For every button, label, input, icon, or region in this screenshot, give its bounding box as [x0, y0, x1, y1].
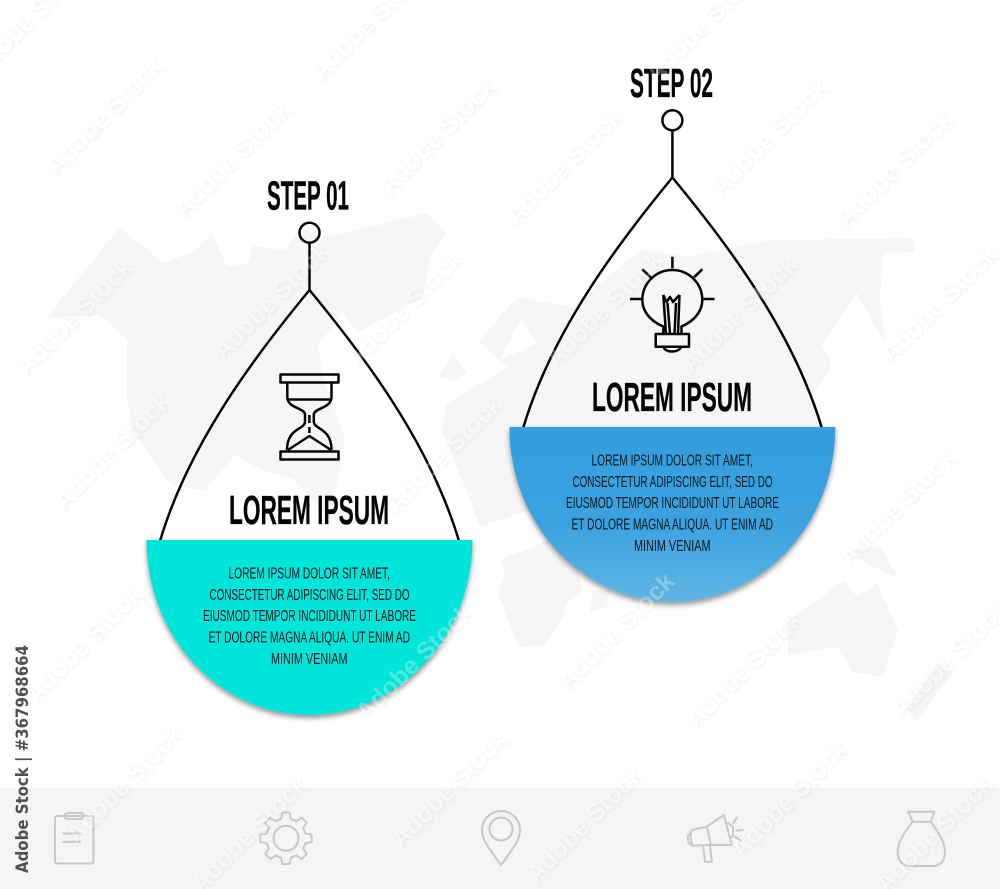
icon: megaphone [688, 815, 743, 862]
stock watermarks: Adobe Stock [373, 72, 501, 200]
stock watermarks: Adobe Stock [520, 760, 648, 888]
step 02 teardrop [509, 60, 835, 602]
stock watermarks: Adobe Stock [830, 105, 958, 233]
step 01 teal panel [146, 540, 472, 715]
step 02 label: STEP 02 [630, 60, 713, 106]
stock watermarks: Adobe Stock [168, 95, 296, 223]
stock watermarks: Adobe Stock [48, 387, 176, 515]
stock watermarks: Adobe Stock [380, 390, 508, 518]
step 01 drop outline [160, 290, 459, 541]
step 02 body text: LOREM IPSUM DOLOR SIT AMET, [592, 452, 753, 470]
step 02 body text: EIUSMOD TEMPOR INCIDIDUNT UT LABORE [566, 495, 779, 512]
stock watermarks: Adobe Stock [725, 735, 853, 863]
step 02 heading: LOREM IPSUM [592, 374, 752, 420]
stock watermarks: Adobe Stock [60, 720, 188, 848]
step 01 teardrop [146, 172, 472, 715]
step 01 heading: LOREM IPSUM [229, 487, 389, 533]
step 01 body text: ET DOLORE MAGNA ALIQUA. UT ENIM AD [208, 630, 410, 646]
step 01 label: STEP 01 [267, 172, 349, 218]
icon: map pin [482, 811, 520, 865]
stock watermarks: Adobe Stock [500, 102, 628, 230]
step 01 body text: EIUSMOD TEMPOR INCIDIDUNT UT LABORE [203, 608, 416, 625]
step 02 blue panel [509, 427, 835, 602]
icon: clipboard [55, 813, 94, 864]
stock watermarks: Adobe Stock [20, 580, 148, 708]
stock watermarks: Adobe Stock [10, 253, 138, 381]
step 02 body text: MINIM VENIAM [634, 538, 710, 555]
stock watermarks: Adobe Stock [350, 598, 478, 726]
stock watermarks: Adobe Stock [552, 567, 680, 695]
step 01 body text: MINIM VENIAM [271, 651, 348, 668]
stock watermarks: Adobe Stock [540, 245, 668, 373]
stock watermarks: Adobe Stock [875, 240, 1000, 368]
bottom icon band [0, 788, 1000, 889]
step 02 pin connector [662, 110, 682, 178]
step 01 pin connector [300, 223, 320, 290]
step 01 body text: LOREM IPSUM DOLOR SIT AMET, [228, 566, 390, 582]
stock watermarks: Adobe Stock [833, 443, 961, 571]
stock watermarks: Adobe Stock [340, 245, 468, 373]
icon: hourglass [280, 374, 338, 460]
world map background [47, 213, 953, 720]
icon: gear [260, 813, 312, 864]
step 02 drop outline [523, 178, 822, 428]
stock watermarks: Adobe Stock [385, 725, 513, 853]
step 01 body text: CONSECTETUR ADIPISCING ELIT, SED DO [210, 587, 410, 604]
step 02 body text: ET DOLORE MAGNA ALIQUA. UT ENIM AD [572, 516, 773, 534]
step 02 body text: CONSECTETUR ADIPISCING ELIT, SED DO [572, 474, 772, 491]
stock watermarks: Adobe Stock [705, 73, 833, 201]
stock watermarks: Adobe Stock [675, 250, 803, 378]
vertical stock id: Adobe Stock | #367968664 [13, 645, 33, 873]
icon: sack [898, 812, 945, 866]
step 01 body text [203, 566, 416, 668]
stock watermarks: Adobe Stock [40, 52, 168, 180]
step 02 body text [566, 452, 779, 555]
stock watermarks: Adobe Stock [680, 605, 808, 733]
icon: light bulb [630, 257, 714, 352]
stock watermarks: Adobe Stock [207, 237, 335, 365]
